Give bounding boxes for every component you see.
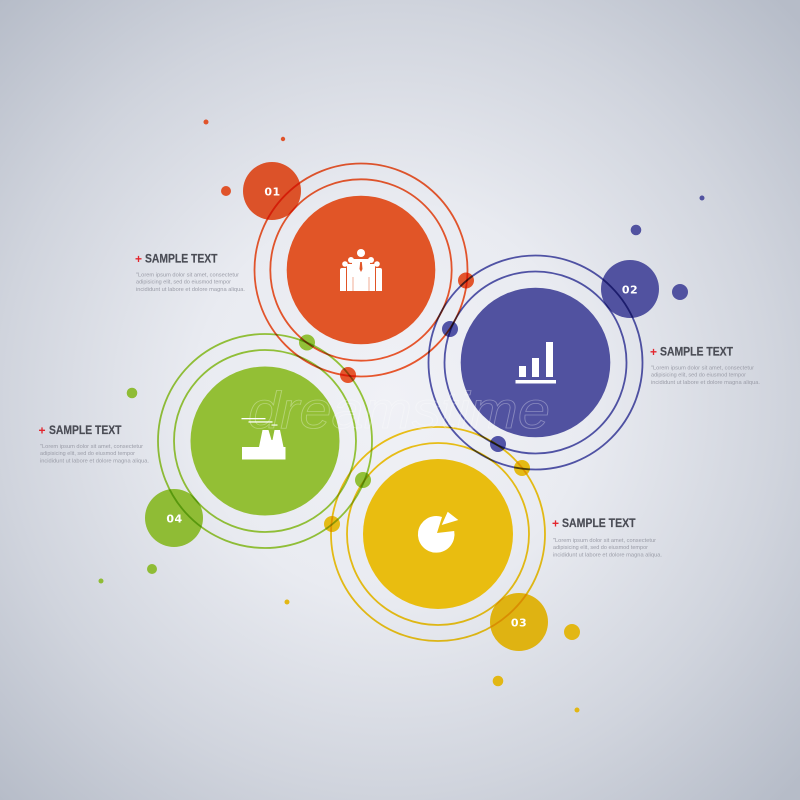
text block 3: [552, 516, 662, 558]
step 4: green circle group: [145, 334, 372, 548]
text block 4: "Lorem ipsum dolor sit amet, consectetur: [40, 444, 143, 450]
text block 3: incididunt ut labore et dolore magna aliqua.: [553, 552, 662, 558]
icon: team of people: [340, 249, 382, 291]
text block 4: +: [38, 424, 46, 438]
watermark: dreamstime: [248, 382, 550, 440]
main circle 3: [363, 459, 513, 609]
number badge 02: [601, 260, 659, 318]
step 1: red circle group: [243, 162, 468, 376]
main circle 1: [287, 196, 435, 344]
text block 4: incididunt ut labore et dolore magna aliqua.: [40, 458, 149, 464]
text block 2: [650, 344, 760, 386]
text block 3: "Lorem ipsum dolor sit amet, consectetur: [553, 538, 656, 544]
step 2: blue circle group: [428, 256, 659, 470]
text block 2: SAMPLE TEXT: [660, 344, 733, 358]
rings 2: [428, 256, 642, 470]
main circle 4: [190, 366, 340, 516]
number badge 04: [145, 489, 203, 547]
text block 2: +: [650, 345, 657, 359]
text block 1: +: [135, 252, 142, 266]
rings 1: [254, 164, 468, 376]
icon: bar chart: [516, 342, 556, 384]
number badge 04: 04: [166, 512, 183, 526]
text block 4: adipisicing elit, sed do eiusmod tempor: [40, 451, 135, 457]
number badge 02: 02: [622, 284, 638, 296]
number badge 01: [243, 162, 301, 220]
text block 4: SAMPLE TEXT: [49, 423, 122, 437]
scattered dots: [98, 120, 704, 712]
text block 3: +: [552, 516, 559, 530]
text block 1: adipisicing elit, sed do eiusmod tempor: [136, 280, 231, 286]
text block 3: SAMPLE TEXT: [562, 516, 636, 530]
text block 1: SAMPLE TEXT: [145, 252, 218, 266]
connector dots: [299, 272, 530, 532]
number badge 01: 01: [264, 186, 281, 198]
step 3: yellow circle group: [331, 427, 548, 651]
text block 2: adipisicing elit, sed do eiusmod tempor: [651, 372, 746, 378]
icon: factory: [242, 418, 286, 460]
number badge 03: 03: [511, 616, 527, 630]
number badge 03: [490, 593, 548, 651]
text block 1: [135, 252, 245, 293]
text block 2: "Lorem ipsum dolor sit amet, consectetur: [651, 366, 754, 372]
text block 1: "Lorem ipsum dolor sit amet, consectetur: [136, 272, 239, 278]
text block 2: incididunt ut labore et dolore magna aliqua.: [651, 380, 760, 386]
rings 4: [158, 334, 372, 548]
text block 4: [38, 423, 149, 464]
main circle 2: [461, 288, 610, 437]
icon: pie chart: [418, 512, 458, 553]
rings 3: [331, 427, 545, 641]
text block 3: adipisicing elit, sed do eiusmod tempor: [553, 545, 648, 551]
text block 1: incididunt ut labore et dolore magna aliqua.: [136, 287, 245, 293]
